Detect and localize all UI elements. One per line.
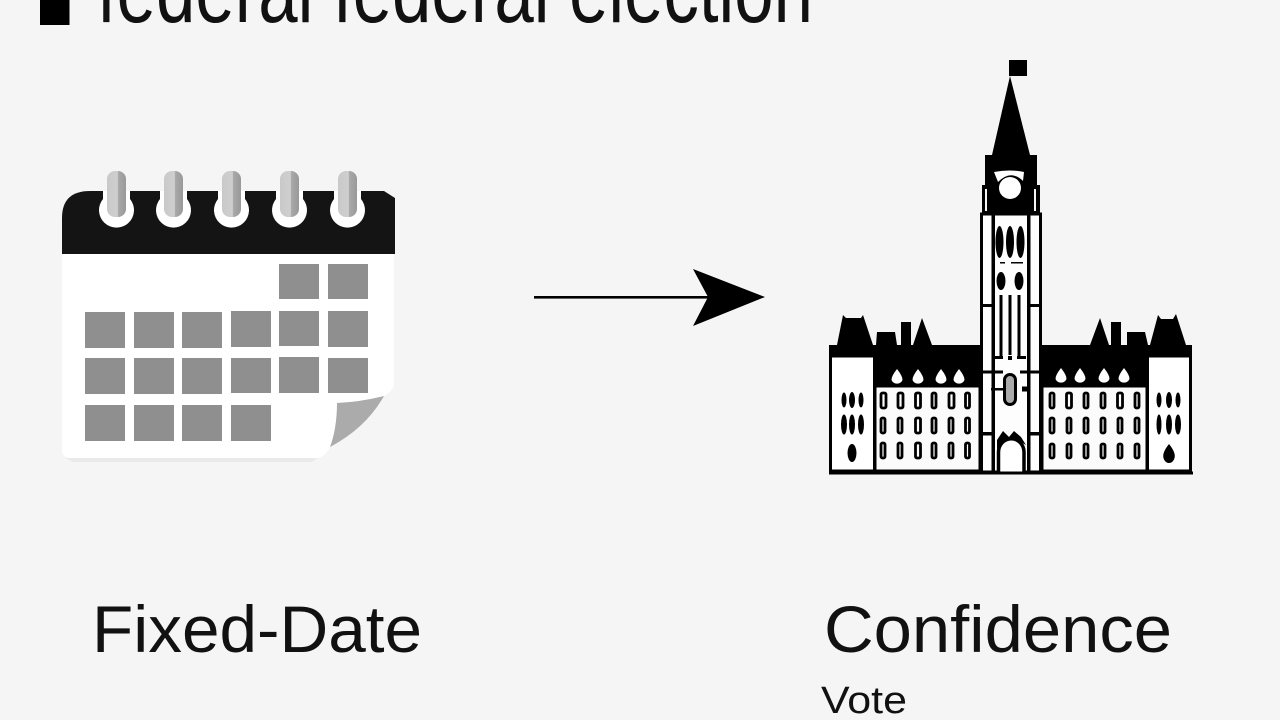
label: Confidence: Confidence — [824, 592, 1172, 666]
tower arched doorway — [998, 439, 1024, 472]
clock block — [982, 155, 1040, 214]
right wing — [1040, 314, 1192, 471]
calendar shadow — [66, 458, 318, 462]
title — [40, 0, 813, 42]
calendar header — [62, 191, 395, 254]
ground line — [829, 472, 1193, 474]
label: Fixed-Date: Fixed-Date — [92, 592, 422, 666]
calendar page — [62, 254, 394, 458]
spire — [992, 76, 1030, 155]
tower central window — [1004, 374, 1016, 404]
calendar rings — [99, 171, 365, 228]
title bullet — [40, 0, 70, 25]
calendar date grid — [85, 264, 368, 441]
arrow — [534, 269, 765, 326]
flag — [1009, 60, 1027, 76]
icon: calendar — [62, 171, 395, 462]
icon: parliament building — [829, 60, 1193, 474]
left wing — [829, 315, 982, 471]
calendar page curl — [330, 396, 384, 447]
clock tower shaft — [981, 214, 1041, 472]
